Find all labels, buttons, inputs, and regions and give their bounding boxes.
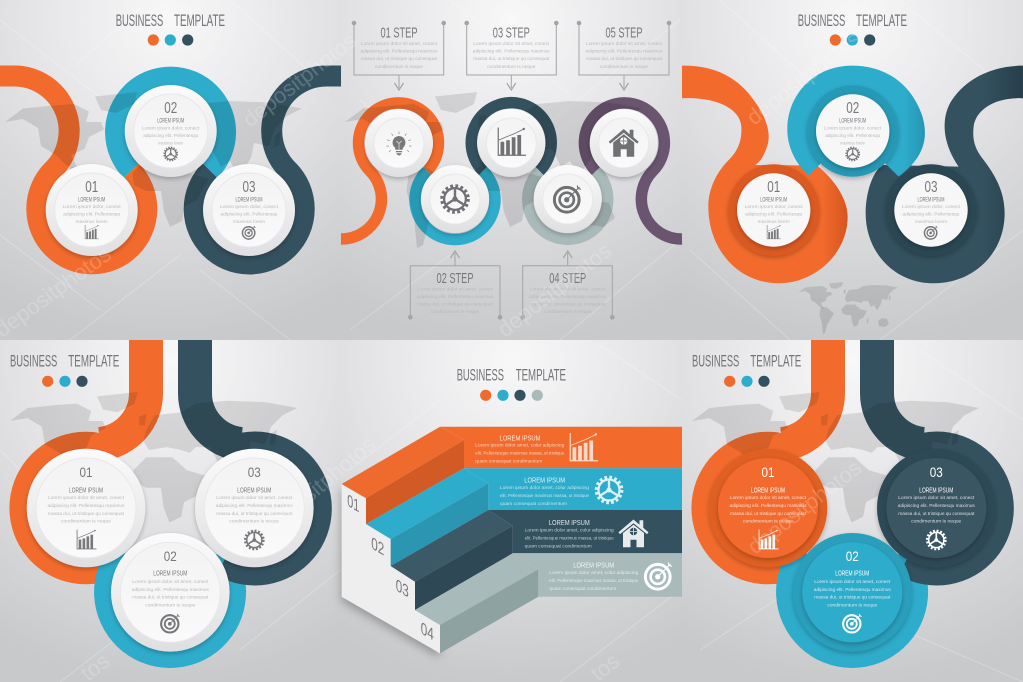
circle 02: adipiscing elit. Pellentesqu bbox=[143, 133, 199, 138]
circle 01: Lorem ipsum dolor, conect bbox=[745, 204, 803, 209]
dark ribbon and ring bbox=[195, 340, 332, 586]
panel 3: thick ribbon rings bbox=[682, 11, 1023, 334]
callout: 04 step: massa dui, ut tristique qu consequat bbox=[530, 302, 606, 306]
circle 03: LOREM IPSUM bbox=[236, 198, 262, 204]
circle 01: Lorem ipsum dolor, conect bbox=[63, 204, 121, 209]
callout: 02 step: adipiscing elit. Pellentesqu maximus bbox=[416, 294, 494, 299]
callout: 03 step: Lorem ipsum dolor sit amet, conect bbox=[473, 41, 550, 46]
band 3: dark: LOREM IPSUM bbox=[549, 518, 590, 527]
circle 02: massa dui, ut tristique qu consequat bbox=[132, 595, 209, 600]
circle 02: 02 bbox=[164, 548, 177, 564]
circle 03: 03 bbox=[248, 464, 261, 480]
circle 03: 03 bbox=[242, 179, 256, 196]
circle 03: Lorem ipsum dolor sit amet, conect bbox=[216, 495, 293, 500]
callout: 02 step: massa dui, ut tristique qu consequat bbox=[417, 302, 494, 306]
callout: 01 step: condimentum is neque bbox=[375, 64, 423, 69]
orange ribbon bbox=[682, 66, 848, 283]
circle 02: 02 bbox=[846, 100, 859, 117]
circle 03 bbox=[203, 164, 295, 256]
world map bbox=[345, 92, 642, 248]
callout: 01 step: Lorem ipsum dolor sit amet, conect bbox=[361, 41, 438, 46]
circle 03: condimentum is neque bbox=[229, 519, 280, 524]
callout: 01 step bbox=[352, 21, 446, 90]
title: business template: BUSINESS bbox=[798, 11, 845, 30]
circle 01: maximus lorem bbox=[76, 219, 108, 224]
circle 02: adipiscing elit. Pellentesqu maximus bbox=[132, 587, 209, 592]
band 3: dark: elit. Pellentesque maximus massa, ut tristique bbox=[525, 536, 614, 540]
title: business template: TEMPLATE bbox=[516, 366, 566, 385]
band 1: orange: elit. Pellentesque maximus massa, ut tristique bbox=[475, 450, 565, 455]
circle 02: 02 bbox=[164, 100, 177, 117]
legend dots bbox=[148, 34, 193, 46]
circle 03: massa dui, ut tristique qu consequat bbox=[898, 511, 975, 516]
orange ribbon bbox=[341, 103, 439, 239]
callout: 01 step: massa dui, ut tristique qu consequat bbox=[361, 56, 438, 61]
watermarks: depositphotos bbox=[493, 238, 616, 342]
dark ribbon bbox=[471, 103, 551, 171]
circle 01: massa dui, ut tristique qu consequat bbox=[730, 511, 807, 516]
panel 2: five step ribbon bbox=[341, 21, 682, 320]
step numbers: 03 bbox=[396, 575, 409, 601]
callout: 05 step: Lorem ipsum dolor sit amet, conect bbox=[586, 41, 663, 46]
band 1: orange: Lorem ipsum dolor amet, colur adipiscing bbox=[475, 442, 565, 447]
watermarks: depositphotos bbox=[238, 28, 361, 132]
step 1 bbox=[342, 427, 464, 524]
band 3: dark: Lorem ipsum dolor amet, colur adipiscing bbox=[525, 528, 614, 532]
circle 01 bbox=[709, 449, 827, 567]
circle 03: maximus lorem bbox=[233, 219, 265, 224]
circle 01: maximus lorem bbox=[758, 219, 790, 224]
circle 02 bbox=[125, 85, 217, 177]
circle 02: Lorem ipsum dolor, conect bbox=[824, 126, 882, 131]
teal ribbon bbox=[787, 66, 925, 177]
circle: bulb bbox=[365, 109, 433, 177]
circle 03: adipiscing elit. Pellentesqu bbox=[220, 212, 278, 216]
circle 02: condimentum is neque bbox=[145, 602, 196, 608]
band 1: orange bbox=[440, 427, 682, 468]
circle: gear bbox=[421, 165, 489, 233]
circle 03: Lorem ipsum dolor sit amet, conect bbox=[898, 495, 975, 500]
band 2: teal: quam consequat condimentum bbox=[500, 501, 567, 506]
callout: 01 step: adipiscing elit. Pellentesqu maximus bbox=[360, 48, 438, 54]
band 4: grey: elit. Pellentesque maximus massa, ut tristique bbox=[549, 578, 639, 583]
circle 01: Lorem ipsum dolor sit amet, conect bbox=[48, 495, 125, 500]
circle 02 bbox=[793, 533, 912, 652]
circle 01: condimentum is neque bbox=[61, 519, 111, 524]
title: business template: TEMPLATE bbox=[856, 11, 907, 30]
world map bbox=[799, 282, 898, 334]
circle 01 bbox=[27, 449, 145, 567]
circle 03: massa dui, ut tristique qu consequat bbox=[216, 511, 293, 516]
circle 03 bbox=[885, 164, 977, 256]
band 4: grey: quam consequat condimentum bbox=[549, 586, 616, 591]
dark ribbon bbox=[194, 76, 341, 264]
orange ribbon bbox=[0, 76, 147, 264]
circle 02: LOREM IPSUM bbox=[835, 569, 869, 578]
band 4: grey: LOREM IPSUM bbox=[573, 561, 614, 570]
circle 03: Lorem ipsum dolor, conect bbox=[220, 204, 279, 209]
circle: chart bbox=[477, 109, 545, 177]
circle 01: adipiscing elit. Pellentesqu maximus bbox=[48, 503, 125, 508]
teal ribbon bbox=[116, 77, 226, 170]
circle 01 bbox=[728, 164, 819, 256]
band 2: teal bbox=[464, 468, 682, 510]
step numbers bbox=[347, 490, 434, 644]
circle 01: 01 bbox=[762, 464, 775, 480]
dark ribbon bbox=[866, 66, 1023, 283]
callout: 04 step bbox=[520, 251, 615, 320]
world map bbox=[5, 92, 302, 248]
callout: 04 step: condimentum is neque bbox=[544, 309, 592, 314]
circle 01: massa dui, ut tristique qu consequat bbox=[48, 511, 125, 516]
watermarks: depositphotos bbox=[742, 26, 865, 130]
circle 03: LOREM IPSUM bbox=[237, 486, 271, 494]
band 3: dark: quam consequat condimentum bbox=[525, 544, 592, 548]
circle 02: maximus lorem bbox=[840, 140, 865, 145]
title: business template: BUSINESS bbox=[116, 11, 163, 30]
circle 03: LOREM IPSUM bbox=[919, 486, 953, 494]
circle 01: LOREM IPSUM bbox=[751, 486, 785, 494]
dark ribbon and ring bbox=[877, 340, 1014, 586]
title: business template: TEMPLATE bbox=[750, 352, 801, 371]
circle: target bbox=[534, 165, 602, 233]
circle 01: 01 bbox=[767, 179, 780, 196]
callout: 05 step: massa dui, ut tristique qu consequat bbox=[586, 56, 663, 61]
circle 02: 02 bbox=[846, 548, 859, 564]
circle 03: maximus lorem bbox=[915, 219, 947, 224]
panel 1: three linked rings bbox=[0, 11, 341, 264]
circle 03: adipiscing elit. Pellentesqu maximus bbox=[216, 503, 293, 508]
callout: 05 step: 05 STEP bbox=[606, 24, 642, 42]
callout: 03 step: 03 STEP bbox=[493, 24, 530, 42]
grey ribbon bbox=[528, 171, 608, 239]
watermarks: depositphotos bbox=[743, 455, 866, 559]
circle 03: LOREM IPSUM bbox=[918, 198, 944, 204]
orange ribbon and ring bbox=[691, 340, 828, 584]
circle: house bbox=[590, 109, 658, 177]
title: business template: TEMPLATE bbox=[68, 352, 119, 371]
panel 4: hanging circles, white bbox=[9, 340, 332, 668]
teal ring bbox=[94, 543, 246, 668]
circle 01: Lorem ipsum dolor sit amet, conect bbox=[730, 495, 807, 500]
title: business template: BUSINESS bbox=[457, 366, 504, 385]
band 2: teal: elit. Pellentesque maximus massa, ut tristique bbox=[500, 493, 589, 498]
panel 6: hanging circles, coloured bbox=[691, 340, 1014, 668]
panel 5: isometric stairs bbox=[342, 366, 682, 653]
callout: 02 step: Lorem ipsum dolor sit amet, conect bbox=[417, 286, 494, 291]
legend dots bbox=[480, 390, 543, 401]
circle 02: adipiscing elit. Pellentesqu maximus bbox=[814, 587, 891, 592]
circle 03: 03 bbox=[924, 179, 938, 196]
callout: 03 step: condimentum is neque bbox=[487, 64, 536, 69]
legend dots bbox=[830, 34, 875, 46]
circle 02: adipiscing elit. Pellentesqu bbox=[825, 133, 881, 138]
circle 02: Lorem ipsum dolor, conect bbox=[142, 126, 200, 131]
circle 02: LOREM IPSUM bbox=[153, 569, 187, 578]
circle 03 bbox=[877, 449, 996, 567]
circle 02: massa dui, ut tristique qu consequat bbox=[814, 595, 891, 600]
step numbers: 01 bbox=[347, 490, 359, 516]
circle 03 bbox=[195, 449, 314, 567]
band 1: orange: quam consequat condimentum bbox=[475, 458, 542, 463]
band 4: grey: Lorem ipsum dolor amet, colur adipiscing bbox=[549, 570, 639, 575]
callout: 03 step: massa dui, ut tristique qu consequat bbox=[473, 56, 550, 61]
step numbers: 04 bbox=[421, 618, 434, 644]
callout: 02 step: 02 STEP bbox=[436, 270, 474, 287]
step 3 bbox=[391, 510, 513, 610]
callout: 04 step: Lorem ipsum dolor sit amet, conect bbox=[530, 286, 606, 291]
circle 01 bbox=[46, 164, 138, 256]
callout: 05 step: condimentum is neque bbox=[600, 64, 648, 69]
title: business template: BUSINESS bbox=[10, 352, 57, 371]
circle 01: adipiscing elit. Pellentesqu maximus bbox=[730, 503, 807, 508]
circle 01: condimentum is neque bbox=[743, 519, 793, 524]
circle 01: LOREM IPSUM bbox=[78, 198, 105, 204]
band 2: teal: Lorem ipsum dolor amet, colur adipiscing bbox=[500, 485, 589, 490]
callout: 03 step: adipiscing elit. Pellentesqu maximus bbox=[473, 48, 550, 54]
legend dots bbox=[724, 376, 770, 387]
circle 03: adipiscing elit. Pellentesqu maximus bbox=[898, 503, 975, 508]
circle 03: condimentum is neque bbox=[911, 519, 962, 524]
stair white side bbox=[342, 484, 440, 653]
callout: 04 step: adipiscing elit. Pellentesqu maximus bbox=[529, 294, 607, 299]
circle 03: Lorem ipsum dolor, conect bbox=[902, 204, 961, 209]
step 4 bbox=[415, 553, 538, 653]
callout: 04 step: 04 STEP bbox=[549, 270, 586, 287]
circle 01: LOREM IPSUM bbox=[760, 198, 787, 204]
watermarks: depositphotos bbox=[259, 432, 380, 539]
circle 02: condimentum is neque bbox=[827, 602, 878, 608]
circle 01: 01 bbox=[85, 179, 98, 196]
circle 02: Lorem ipsum dolor sit amet, conect bbox=[132, 579, 209, 584]
callout: 05 step: adipiscing elit. Pellentesqu maximus bbox=[586, 48, 663, 54]
world map bbox=[692, 392, 979, 543]
circle 02: maximus lorem bbox=[158, 140, 183, 145]
callout: 02 step: condimentum is neque bbox=[431, 309, 479, 314]
callout: 05 step bbox=[577, 21, 671, 90]
teal ring bbox=[776, 543, 928, 668]
callout: 03 step bbox=[464, 21, 559, 90]
circle 01: 01 bbox=[80, 464, 93, 480]
circle 03: 03 bbox=[930, 464, 943, 480]
circle 01: adipiscing elit. Pellentesqu bbox=[745, 212, 803, 216]
band 1: orange: LOREM IPSUM bbox=[500, 434, 540, 443]
callout: 01 step: 01 STEP bbox=[380, 24, 418, 42]
circle 03: adipiscing elit. Pellentesqu bbox=[902, 212, 960, 216]
world map bbox=[10, 392, 297, 543]
teal ribbon bbox=[415, 171, 495, 240]
step 2 bbox=[366, 468, 488, 566]
purple ribbon bbox=[584, 103, 682, 239]
step numbers: 02 bbox=[371, 533, 384, 559]
title: business template: BUSINESS bbox=[692, 352, 739, 371]
circle 02 bbox=[807, 85, 898, 177]
band 4: grey bbox=[513, 553, 682, 597]
callout: 02 step bbox=[408, 251, 502, 320]
circle 02: LOREM IPSUM bbox=[839, 118, 866, 124]
circle 02 bbox=[111, 533, 230, 652]
circle 01: adipiscing elit. Pellentesqu bbox=[63, 212, 121, 216]
circle 02: Lorem ipsum dolor sit amet, conect bbox=[814, 579, 891, 584]
circle 01: LOREM IPSUM bbox=[69, 486, 103, 494]
orange ribbon and ring bbox=[9, 340, 146, 584]
legend dots bbox=[42, 376, 88, 387]
title: business template: TEMPLATE bbox=[174, 11, 225, 30]
circle 02: LOREM IPSUM bbox=[157, 118, 184, 124]
band 2: teal: LOREM IPSUM bbox=[524, 476, 565, 484]
band 3: dark bbox=[488, 510, 682, 553]
